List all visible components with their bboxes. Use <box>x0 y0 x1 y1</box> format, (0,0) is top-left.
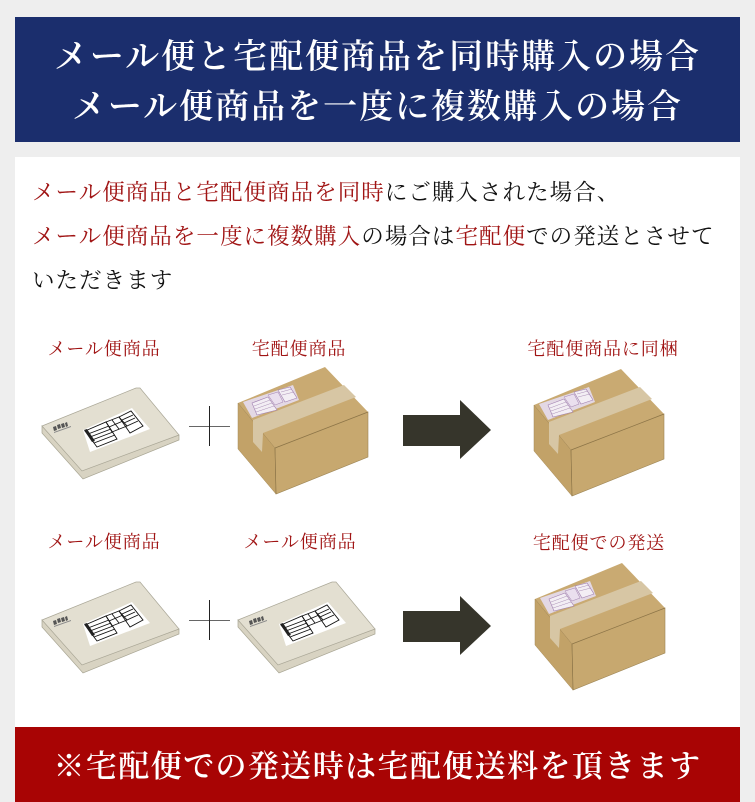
icon: mail packet row 2 right <box>238 582 375 673</box>
footer text: ※宅配便での発送時は宅配便送料を頂きます <box>54 749 702 784</box>
label: parcel item row 1: 宅配便商品 <box>252 339 346 359</box>
arrow row 2 <box>403 596 491 655</box>
panel: footer banner <box>15 727 740 802</box>
icon: plus row 1 <box>189 406 230 446</box>
label: bundled: 宅配便商品に同梱 <box>527 339 679 359</box>
panel: header <box>15 17 740 142</box>
text line 2: メール便商品を一度に複数購入の場合は宅配便での発送とさせて <box>32 224 715 249</box>
label: parcel delivery: 宅配便での発送 <box>533 533 665 553</box>
icon: bundled box <box>534 369 664 496</box>
text line 3: いただきます <box>32 268 173 293</box>
icon: mail packet row 2 left <box>42 582 179 673</box>
icon: plus row 2 <box>189 600 230 640</box>
heading line 1: メール便と宅配便商品を同時購入の場合 <box>54 39 701 76</box>
label: mail item row 2 left: メール便商品 <box>47 532 161 552</box>
label: mail item row 2 right: メール便商品 <box>243 532 357 552</box>
arrow row 1 <box>403 400 491 459</box>
icon: delivery box <box>535 563 665 690</box>
icon: mail packet row 1 <box>42 388 179 479</box>
icon: parcel box row 1 <box>238 367 368 494</box>
heading line 2: メール便商品を一度に複数購入の場合 <box>72 89 683 126</box>
panel: white content <box>15 157 740 727</box>
text line 1: メール便商品と宅配便商品を同時にご購入された場合、 <box>32 180 620 205</box>
label: mail item row 1 left: メール便商品 <box>47 339 161 359</box>
